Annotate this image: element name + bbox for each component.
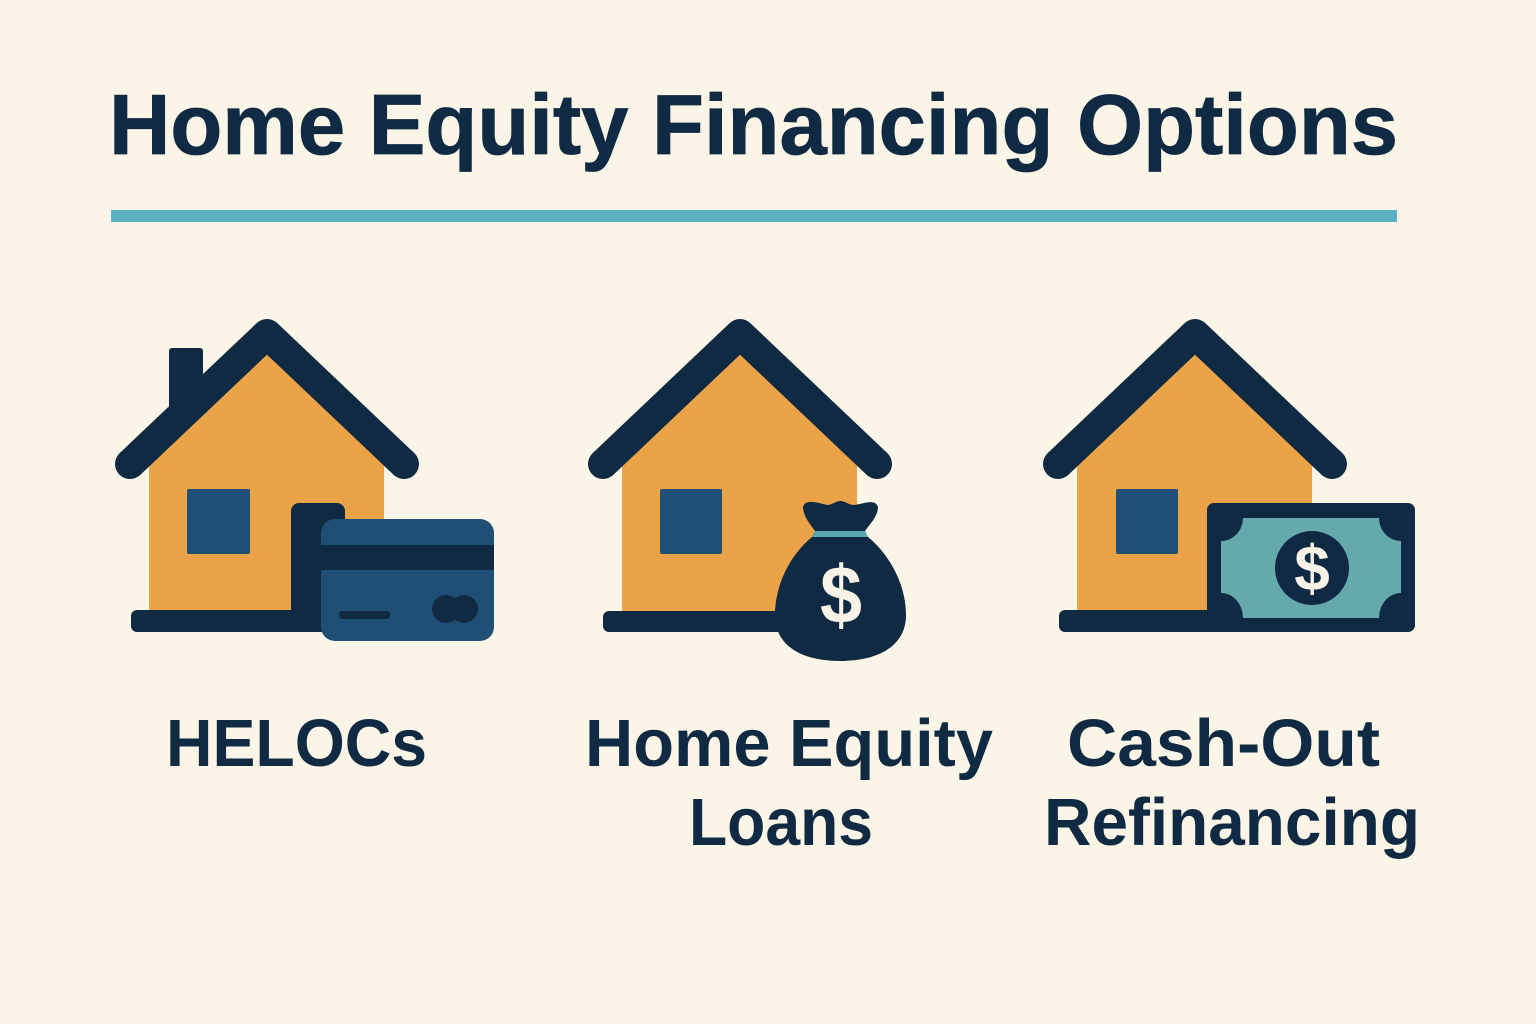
icon: house with banknote (Cash-Out Refinancing): [1058, 334, 1415, 632]
banknote: [1207, 503, 1415, 632]
title: Home Equity Financing Options: [109, 78, 1398, 173]
label: Cash-Out Refinancing: [1044, 706, 1420, 860]
label: HELOCs: HELOCs: [166, 706, 427, 781]
label: Home Equity Loans: Loans: [689, 785, 873, 860]
label: Home Equity Loans: [585, 706, 993, 860]
banknote: $: [1294, 532, 1330, 604]
icon: house with credit card (HELOCs): [130, 334, 494, 641]
credit card: [321, 519, 494, 641]
money bag: [775, 501, 906, 661]
label: Cash-Out Refinancing: Refinancing: [1044, 785, 1420, 860]
label: Cash-Out Refinancing: Cash-Out: [1067, 706, 1380, 781]
money bag: $: [820, 550, 862, 641]
title underline: [111, 210, 1397, 222]
label: Home Equity Loans: Home Equity: [585, 706, 993, 781]
icon: house with money bag (Home Equity Loans): [603, 334, 906, 661]
